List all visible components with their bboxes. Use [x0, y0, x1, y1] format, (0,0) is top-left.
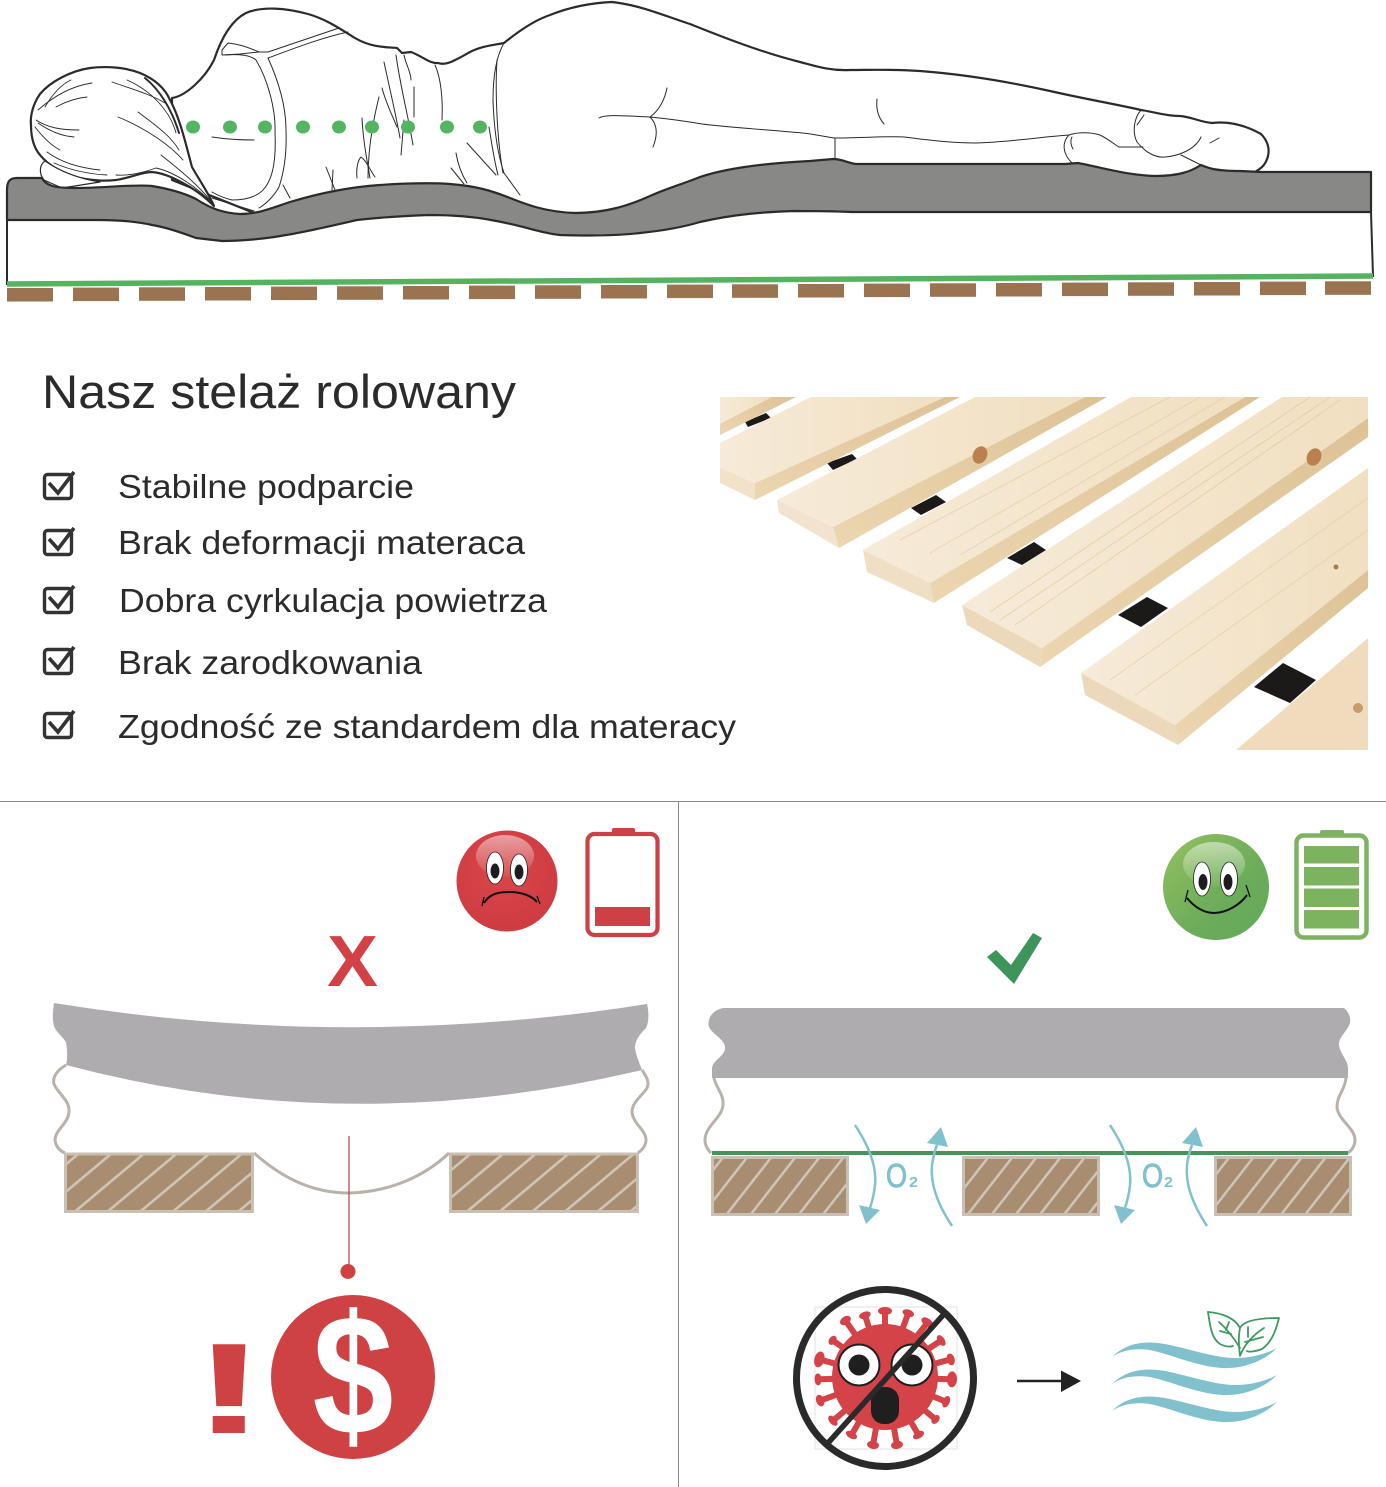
hip and leg lines — [599, 116, 1143, 147]
air flow arrows and oxygen labels: O — [1142, 1157, 1163, 1194]
slat 6 — [1081, 468, 1368, 745]
section dividers — [0, 801, 1386, 1487]
slat 2 — [720, 397, 960, 500]
item: air circulation: Dobra cyrkulacja powietrza — [119, 583, 547, 620]
item: no germs: Brak zarodkowania — [118, 645, 422, 682]
memory foam layer — [7, 159, 1371, 241]
left hatched slat — [66, 1154, 252, 1212]
right hatched slat — [450, 1154, 638, 1212]
slat 1 — [712, 1158, 848, 1214]
slat 4 — [863, 397, 1260, 603]
item: stable support: Stabilne podparcie — [118, 469, 414, 506]
garment straps — [222, 28, 339, 55]
dollar cost icon — [271, 1279, 435, 1471]
black straps — [745, 413, 1316, 703]
happy green face icon — [1163, 834, 1269, 940]
prohibited virus icon — [796, 1290, 974, 1466]
sagging mattress body — [54, 1065, 648, 1193]
slat 3 — [777, 397, 1107, 548]
dollar cost icon: $ — [313, 1279, 393, 1471]
air flow arrows and oxygen labels: 2 — [909, 1174, 918, 1191]
green spine alignment dots — [186, 120, 487, 134]
red pointer line — [340, 1136, 356, 1279]
low battery icon — [588, 828, 658, 935]
mattress white base — [7, 212, 1373, 284]
warning exclamation mark: ! — [191, 1317, 267, 1461]
sagging foam layer — [53, 1003, 648, 1104]
panel: good support — [705, 830, 1366, 1466]
heading: Nasz stelaż rolowany — [42, 365, 517, 418]
air flow arrows and oxygen labels — [855, 1125, 1207, 1226]
fresh air waves with leaves icon — [1112, 1312, 1279, 1422]
feature list — [44, 469, 736, 746]
pillow tip — [40, 161, 100, 188]
air flow arrows and oxygen labels: O — [886, 1157, 907, 1194]
wooden slats row — [7, 281, 1371, 302]
body outline — [31, 2, 1269, 215]
slat 3 — [1216, 1158, 1350, 1214]
slat 2 — [964, 1158, 1098, 1214]
flat foam layer — [708, 1008, 1350, 1078]
sleeping figure on mattress diagram — [7, 2, 1373, 302]
wooden roll slat frame illustration — [720, 397, 1368, 750]
black arrow — [1017, 1370, 1081, 1392]
slat 5 — [962, 397, 1368, 667]
panel: bad support — [53, 828, 658, 1471]
sad red face icon — [456, 830, 558, 932]
head — [31, 67, 214, 206]
slat 1 — [720, 397, 796, 435]
flat mattress sides — [705, 1078, 1355, 1153]
green support line — [7, 276, 1373, 284]
item: no deformation: Brak deformacji materaca — [118, 525, 525, 562]
air flow arrows and oxygen labels: 2 — [1164, 1174, 1173, 1191]
green check mark — [987, 933, 1042, 984]
slat 7 — [1236, 638, 1368, 750]
item: standard compliance: Zgodność ze standardem dla materacy — [118, 709, 736, 746]
green support line — [712, 1151, 1348, 1155]
full battery icon — [1296, 830, 1366, 938]
red X mark: X — [327, 922, 378, 1002]
